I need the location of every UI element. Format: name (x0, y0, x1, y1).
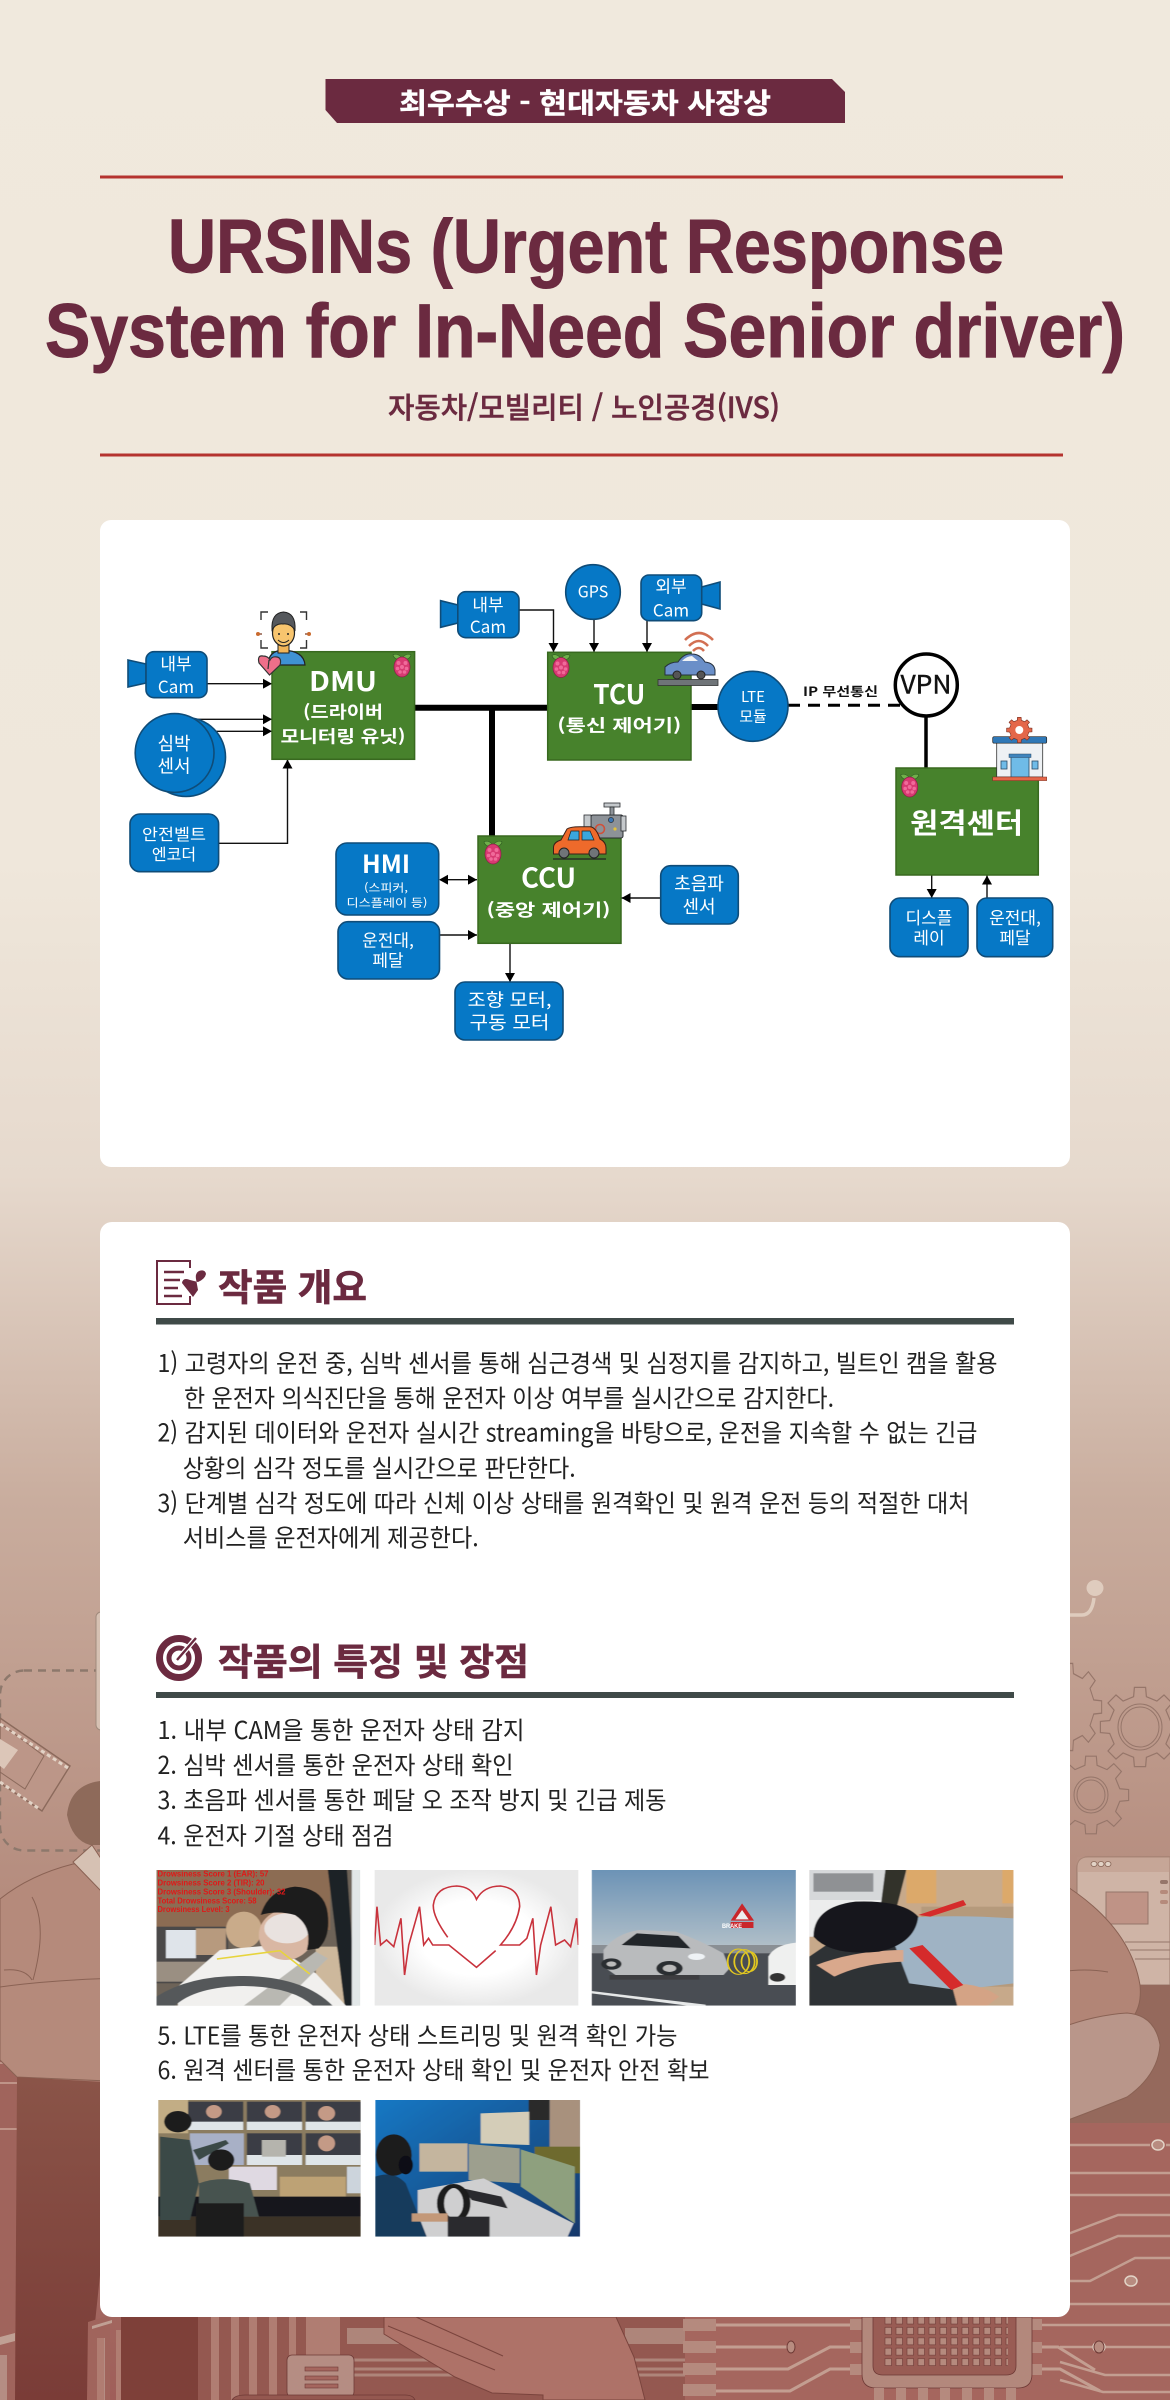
icon: raspberry on remote center (901, 774, 919, 797)
list: features 5 to 6: 6. 원격 센터를 통한 운전자 상태 확인 및 운전자 안전 확보 (158, 2052, 710, 2087)
icon: orange car (553, 827, 606, 859)
steering wheel and pedal box center: 페달 (372, 947, 404, 972)
photo: driver monitoring camera: Total Drowsiness Score: 58 (158, 1896, 257, 1905)
HMI box: HMI (362, 845, 410, 881)
photo: emergency braking car (592, 1870, 796, 2006)
display box (890, 898, 968, 957)
DMU block: DMU (309, 660, 377, 699)
motor box: 조향 모터, (468, 987, 552, 1013)
text block: overview: 상황의 심각 정도를 실시간으로 판단한다. (183, 1450, 576, 1485)
photo: driver monitoring camera (156, 1870, 360, 2006)
DMU block: 모니터링 유닛) (280, 723, 406, 748)
steering wheel and pedal box center: 운전대, (362, 927, 414, 952)
icon: service building (993, 717, 1047, 781)
TCU block: TCU (593, 673, 645, 712)
award badge (326, 79, 845, 123)
ultrasonic sensor box: 초음파 (674, 870, 724, 896)
steering wheel and pedal box center (338, 922, 440, 979)
display box: 디스플 (906, 904, 952, 929)
heart rate sensor (135, 714, 226, 796)
remote center block: 원격센터 (910, 802, 1023, 842)
GPS (566, 565, 620, 619)
icon: target (160, 1638, 198, 1678)
list: features 1 to 4: 1. 내부 CAM을 통한 운전자 상태 감지 (158, 1712, 524, 1747)
upper internal camera: 내부 (472, 591, 504, 616)
photo: remote driving station (375, 2100, 580, 2237)
rule (156, 1692, 1014, 1698)
icon: raspberry on CCU (484, 841, 502, 864)
photo: emergency braking car: BRAKE (722, 1924, 742, 1930)
list: features 1 to 4: 2. 심박 센서를 통한 운전자 상태 확인 (158, 1747, 514, 1782)
list: features 5 to 6: 5. LTE를 통한 운전자 상태 스트리밍 및 원격 확인 가능 (158, 2017, 678, 2052)
award badge: 최우수상 - 현대자동차 사장상 (399, 82, 771, 122)
title: URSINs (Urgent Response (168, 204, 1004, 290)
display box: 레이 (913, 924, 945, 949)
LTE module: 모듈 (739, 706, 767, 727)
ultrasonic sensor box (661, 866, 738, 924)
icon: left internal camera: Cam (158, 673, 194, 698)
background illustration: left character and film strip (0, 1612, 130, 2400)
seat belt encoder: 안전벨트 (142, 821, 206, 845)
icon: left internal camera (128, 650, 207, 698)
external camera (641, 573, 720, 622)
text block: overview: 2) 감지된 데이터와 운전자 실시간 streaming을 바탕으로, 운전을 지속할 수 없는 긴급 (158, 1414, 978, 1450)
icon: document with heart (157, 1261, 206, 1304)
LTE module: LTE (741, 686, 765, 707)
photo: driver monitoring camera: Drowsiness Score 1 (EAR): 57 (158, 1870, 269, 1879)
top rule (100, 176, 1063, 178)
label: IP wireless: IP 무선통신 (803, 681, 878, 700)
photo: driver monitoring camera: Drowsiness Score 3 (Shoulder): 32 (158, 1888, 286, 1897)
bottom rule (100, 454, 1063, 456)
LTE module (718, 671, 788, 741)
text block: overview: 3) 단계별 심각 정도에 따라 신체 이상 상태를 원격확인 및 원격 운전 등의 적절한 대처 (158, 1485, 970, 1520)
heading: features: 작품의 특징 및 장점 (218, 1632, 529, 1686)
background illustration: bottom strip with hand and chip (97, 2316, 1104, 2400)
heading: overview: 작품 개요 (218, 1258, 367, 1312)
icon: engine (584, 803, 626, 838)
steering wheel and pedal box right: 운전대, (989, 904, 1041, 929)
CCU block (478, 836, 621, 943)
HMI box (336, 843, 439, 915)
photo: driver monitoring camera: Drowsiness Level: 3 (158, 1905, 230, 1914)
photo: driver monitoring camera: Drowsiness Score 2 (TIR): 20 (158, 1879, 265, 1888)
motor box (455, 982, 563, 1040)
list: features 5 to 6 (158, 2017, 710, 2087)
HMI box: (스피커, (364, 880, 408, 896)
upper internal camera (441, 591, 519, 638)
GPS: GPS (578, 579, 608, 603)
list: features 1 to 4 (158, 1712, 666, 1852)
motor box: 구동 모터 (470, 1009, 550, 1035)
connection lines (196, 610, 987, 982)
ultrasonic sensor box: 센서 (682, 893, 716, 919)
text block: overview (158, 1345, 998, 1554)
icon: left internal camera: 내부 (160, 650, 192, 675)
icon: connected car (658, 633, 718, 686)
CCU block: (중앙 제어기) (486, 896, 610, 921)
subtitle: 자동차/모빌리티 / 노인공경(IVS) (388, 385, 780, 427)
rule (156, 1318, 1014, 1324)
CCU block: CCU (521, 857, 576, 896)
seat belt encoder (130, 814, 219, 872)
panel: system diagram (100, 520, 1070, 1167)
upper internal camera: Cam (470, 613, 506, 638)
panel: description (100, 1222, 1070, 2317)
seat belt encoder: 엔코더 (152, 841, 196, 865)
TCU block (548, 652, 691, 760)
remote center block (896, 768, 1038, 875)
DMU block: (드라이버 (303, 698, 383, 723)
VPN node (895, 654, 957, 716)
title (45, 204, 1125, 374)
text block: overview: 한 운전자 의식진단을 통해 운전자 이상 여부를 실시간으로 감지한다. (184, 1380, 834, 1415)
photo: heart and ECG (375, 1870, 578, 2006)
steering wheel and pedal box right: 페달 (999, 924, 1031, 949)
external camera: 외부 (655, 573, 687, 598)
background illustration: right gears, window, hand and circuit board (683, 1580, 1170, 2400)
external camera: Cam (653, 597, 689, 622)
photo: remote control room (158, 2100, 361, 2237)
HMI box: 디스플레이 등) (346, 895, 428, 911)
steering wheel and pedal box right (977, 898, 1053, 957)
icon: raspberry on TCU (552, 655, 570, 678)
photo: driver fainted (809, 1870, 1014, 2006)
TCU block: (통신 제어기) (557, 712, 681, 737)
icon: raspberry on DMU (393, 654, 411, 677)
text block: overview: 서비스를 운전자에게 제공한다. (183, 1520, 479, 1554)
list: features 1 to 4: 4. 운전자 기절 상태 점검 (158, 1818, 394, 1852)
VPN node: VPN (900, 666, 952, 702)
DMU block (272, 652, 415, 759)
icon: driver monitoring person (256, 612, 311, 675)
heart rate sensor: 센서 (157, 753, 191, 779)
heart rate sensor: 심박 (157, 730, 191, 756)
text block: overview: 1) 고령자의 운전 중, 심박 센서를 통해 심근경색 및 심정지를 감지하고, 빌트인 캠을 활용 (158, 1345, 998, 1380)
list: features 1 to 4: 3. 초음파 센서를 통한 페달 오 조작 방지 및 긴급 제동 (158, 1782, 666, 1817)
